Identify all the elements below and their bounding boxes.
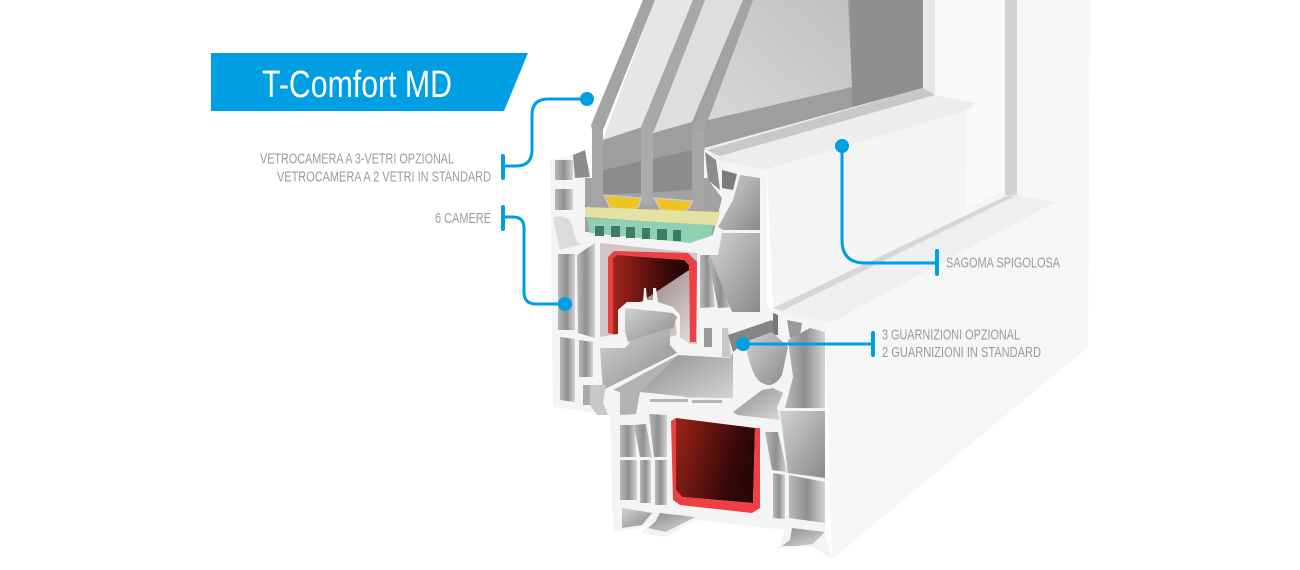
inner sash cleat: [600, 288, 722, 357]
lower frame gasket chambers: [733, 320, 825, 420]
callout: glazing: [260, 92, 594, 186]
lower frame chambers: [620, 411, 825, 523]
green glazing block: [587, 218, 713, 243]
lower reinforcement red steel: [671, 418, 760, 513]
glazing gaskets: [553, 150, 737, 250]
rebate interior and pane edges: [585, 128, 722, 235]
glazing packer: [585, 207, 720, 226]
callout: sharp profile: SAGOMA SPIGOLOSA: [946, 254, 1060, 272]
seal gasket detail: [583, 313, 778, 415]
white profile section: [550, 150, 832, 559]
callout: glazing: VETROCAMERA A 3-VETRI OPZIONAL: [260, 150, 454, 168]
spacer gaskets yellow: [604, 195, 692, 212]
upper reinforcement red steel: [608, 251, 697, 342]
callout: chambers: 6 CAMERE: [435, 210, 491, 227]
callout: gaskets: 3 GUARNIZIONI OPZIONAL: [882, 326, 1020, 344]
window profile illustration: [550, 0, 1090, 559]
callout: gaskets: 2 GUARNIZIONI IN STANDARD: [882, 344, 1041, 361]
sash face with sharp profile: [704, 0, 1017, 308]
frame feet: [622, 508, 825, 546]
rebate chamber: [600, 328, 677, 390]
callout: gaskets: [736, 326, 1041, 361]
callout: chambers: [435, 207, 572, 311]
callout: glazing: VETROCAMERA A 2 VETRI IN STANDARD: [277, 168, 491, 186]
title banner: [211, 53, 528, 111]
sill piece: [613, 352, 733, 415]
glass panes background: [591, 0, 923, 212]
title banner: T-Comfort MD: [262, 64, 452, 106]
frame top chamfer: [773, 195, 1055, 323]
outer frame side face: [825, 0, 1090, 559]
upper sash chambers: [555, 160, 760, 402]
callout: sharp profile: [835, 139, 1060, 274]
